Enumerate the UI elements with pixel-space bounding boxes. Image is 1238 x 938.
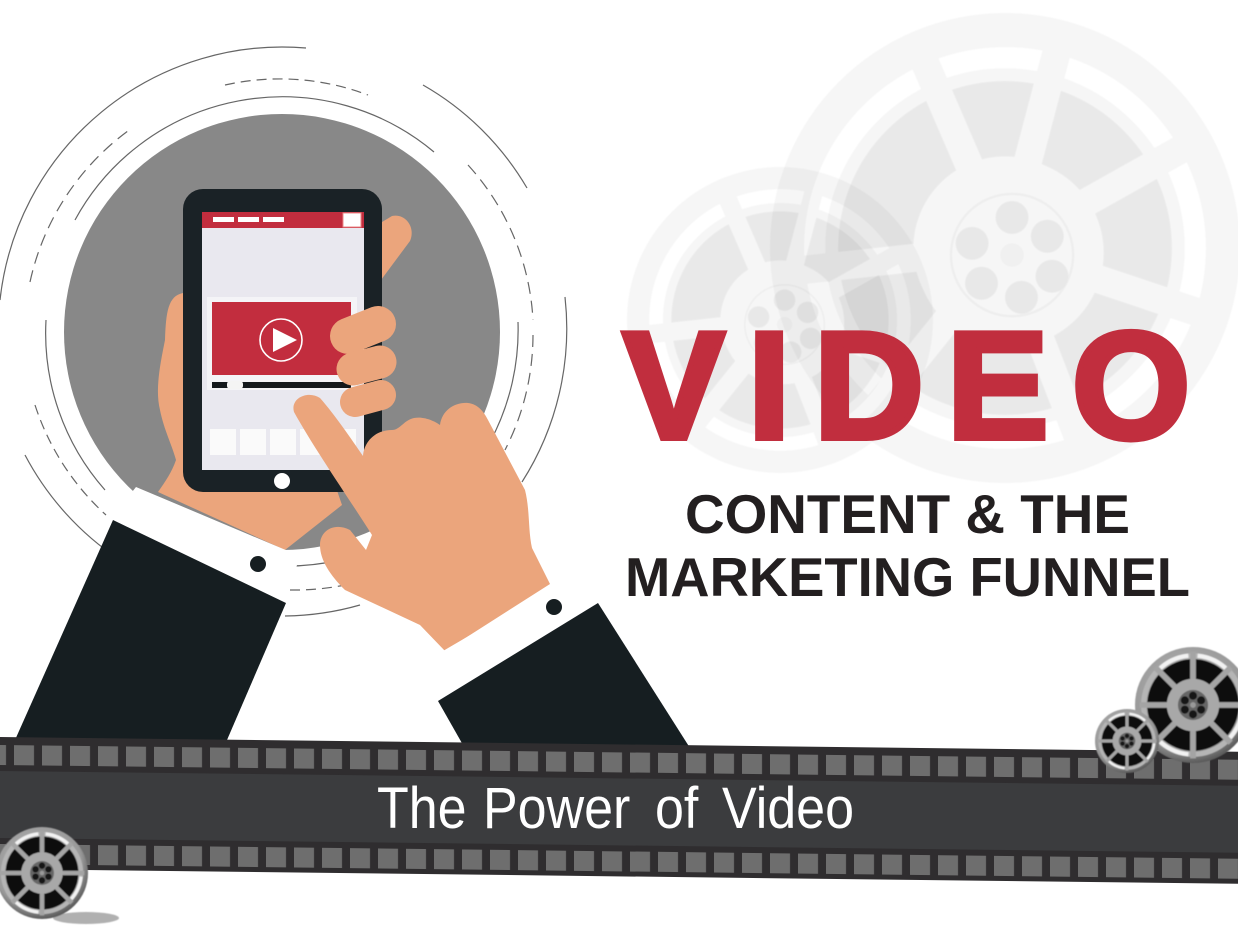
left hand holding phone: [158, 216, 412, 550]
white shirt cuff left: [110, 487, 300, 604]
screen: [202, 212, 364, 470]
centre band: [0, 771, 1238, 853]
phone body: [183, 189, 382, 492]
big ghost reel: [770, 13, 1238, 483]
right pointing hand: [293, 395, 550, 651]
white shirt cuff right: [443, 589, 600, 690]
thumbnails: [210, 429, 356, 455]
phone: [183, 189, 382, 492]
play button: [260, 319, 302, 361]
banner title: The: [377, 775, 467, 841]
small reel: [1095, 709, 1159, 773]
cuff button right: [546, 599, 562, 615]
subtitle line 1: CONTENT & THE: [685, 483, 1130, 545]
film reels on banner right: [1095, 647, 1238, 773]
lower perforations: [0, 844, 1238, 879]
fingers gripping phone: [348, 324, 381, 402]
title VIDEO: VIDEO: [623, 301, 1190, 471]
thumb behind phone: [372, 216, 412, 284]
upper perforations: [0, 745, 1238, 780]
right suit sleeve: [438, 603, 690, 748]
video player: [207, 297, 357, 390]
progress bar: [212, 382, 351, 388]
left suit sleeve: [15, 520, 286, 740]
home button: [274, 473, 290, 489]
subtitle line 2: MARKETING FUNNEL: [625, 546, 1190, 608]
cuff button left: [250, 556, 266, 572]
banner title: Power: [483, 775, 630, 841]
strip body: [0, 737, 1238, 884]
banner title: of: [655, 775, 699, 841]
grey circle behind phone: [64, 114, 500, 550]
app header bar: [202, 212, 364, 228]
film strip banner: [0, 737, 1238, 884]
banner title: Video: [722, 775, 854, 841]
film reel on banner left with shadow: [0, 827, 119, 924]
shadow: [53, 912, 119, 924]
subtitle: [625, 483, 1190, 608]
small ghost reel: [627, 167, 933, 473]
decorative orbit arcs: [0, 47, 567, 616]
large reel: [1135, 647, 1238, 763]
